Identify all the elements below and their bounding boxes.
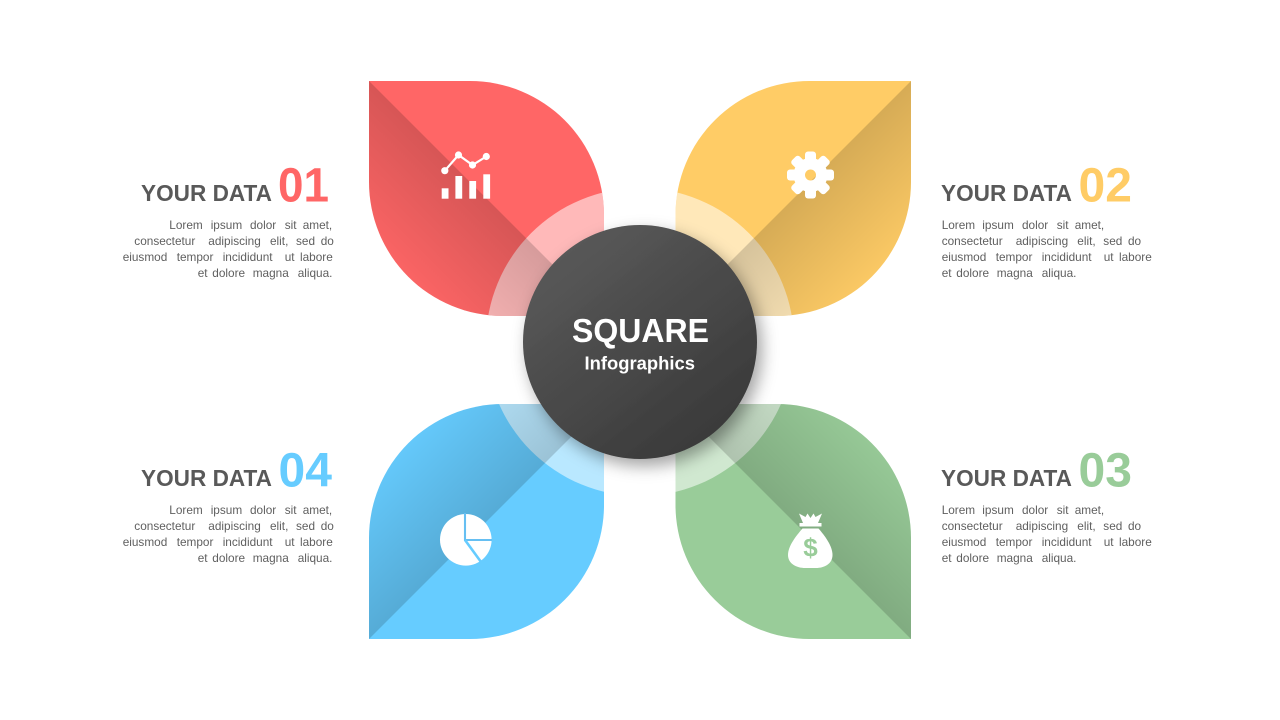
body 04: ut (285, 535, 295, 549)
body 01: consectetur (134, 234, 195, 248)
body 04: elit, (270, 519, 288, 533)
body 01: aliqua. (298, 266, 332, 280)
body 02: Lorem (942, 218, 975, 232)
petal 01: red (369, 81, 604, 316)
body 03: dolor (1022, 503, 1048, 517)
body 04: ipsum (211, 503, 242, 517)
body 01: elit, (270, 234, 288, 248)
body 02: aliqua. (1042, 266, 1076, 280)
body 04: Lorem (169, 503, 203, 517)
text block 02 (941, 160, 1152, 280)
body 02: ut (1104, 250, 1114, 264)
body 04: dolor (250, 503, 276, 517)
body 04: labore (300, 535, 333, 549)
body 02: dolor (1022, 218, 1048, 232)
icon: gear (787, 152, 834, 198)
heading 02: YOUR DATA (941, 180, 1072, 206)
petal 02: yellow (676, 81, 911, 316)
heading 01: YOUR DATA (141, 180, 272, 206)
icon: line and bar chart (441, 151, 490, 199)
number 02: 02 (1078, 160, 1132, 212)
body 02: tempor (996, 250, 1032, 264)
icon: money bag (788, 514, 832, 568)
petal 04: blue (369, 404, 604, 639)
body 03: aliqua. (1042, 551, 1076, 565)
body 01: adipiscing (208, 234, 261, 248)
body 03: tempor (996, 535, 1032, 549)
body 03: amet, (1075, 503, 1104, 517)
body 03: magna (997, 551, 1033, 565)
body 03: incididunt (1042, 535, 1092, 549)
body 01: incididunt (223, 250, 273, 264)
heading 04: YOUR DATA (141, 465, 272, 491)
body 01: ipsum (211, 218, 242, 232)
center title: SQUARE (572, 313, 709, 350)
body 01: eiusmod (123, 250, 167, 264)
body 02: do (1128, 234, 1142, 248)
number 03: 03 (1078, 444, 1132, 498)
body 01: ut (285, 250, 295, 264)
petal 03: green (676, 404, 911, 639)
number 01: 01 (278, 160, 329, 212)
body 01: et (198, 266, 208, 280)
body 03: elit, (1077, 519, 1096, 533)
icon: money bag: $ (803, 532, 818, 562)
body 03: sed (1103, 519, 1122, 533)
body 02: sed (1103, 234, 1122, 248)
center subtitle: Infographics (584, 354, 695, 374)
body 04: magna (253, 551, 289, 565)
body 04: dolore (212, 551, 246, 565)
body 03: ut (1104, 535, 1114, 549)
body 01: magna (253, 266, 289, 280)
infographic canvas (123, 81, 1152, 639)
text block 03 (941, 444, 1152, 565)
body 02: et (942, 266, 952, 280)
body 04: incididunt (223, 535, 273, 549)
body 02: dolore (956, 266, 990, 280)
body 04: sed (296, 519, 315, 533)
body 03: consectetur (942, 519, 1003, 533)
icon: pie chart (440, 513, 492, 566)
body 03: dolore (956, 551, 990, 565)
body 02: adipiscing (1016, 234, 1068, 248)
body 01: amet, (303, 218, 332, 232)
body 03: et (942, 551, 952, 565)
body 03: sit (1057, 503, 1069, 517)
body 04: adipiscing (208, 519, 261, 533)
body 04: aliqua. (298, 551, 332, 565)
body 01: sit (285, 218, 297, 232)
body 02: amet, (1075, 218, 1104, 232)
body 01: tempor (177, 250, 213, 264)
body 02: eiusmod (942, 250, 986, 264)
body 04: tempor (177, 535, 213, 549)
body 02: magna (997, 266, 1033, 280)
body 03: ipsum (982, 503, 1014, 517)
text block 01 (123, 160, 334, 280)
body 04: amet, (303, 503, 332, 517)
body 02: labore (1119, 250, 1152, 264)
body 01: dolor (250, 218, 276, 232)
body 04: consectetur (134, 519, 195, 533)
body 01: do (321, 234, 334, 248)
body 01: Lorem (169, 218, 203, 232)
body 01: sed (296, 234, 315, 248)
body 01: labore (300, 250, 333, 264)
body 04: et (198, 551, 208, 565)
body 04: sit (285, 503, 297, 517)
body 03: eiusmod (942, 535, 986, 549)
body 02: ipsum (982, 218, 1014, 232)
body 03: labore (1119, 535, 1152, 549)
body 03: Lorem (942, 503, 975, 517)
body 04: eiusmod (123, 535, 167, 549)
body 04: do (321, 519, 334, 533)
body 02: sit (1057, 218, 1069, 232)
body 03: do (1128, 519, 1142, 533)
center circle (523, 225, 757, 459)
body 01: dolore (212, 266, 246, 280)
body 02: consectetur (942, 234, 1003, 248)
heading 03: YOUR DATA (941, 465, 1072, 491)
body 02: incididunt (1042, 250, 1092, 264)
body 03: adipiscing (1016, 519, 1068, 533)
body 02: elit, (1077, 234, 1096, 248)
number 04: 04 (278, 444, 332, 498)
text block 04 (123, 444, 334, 565)
